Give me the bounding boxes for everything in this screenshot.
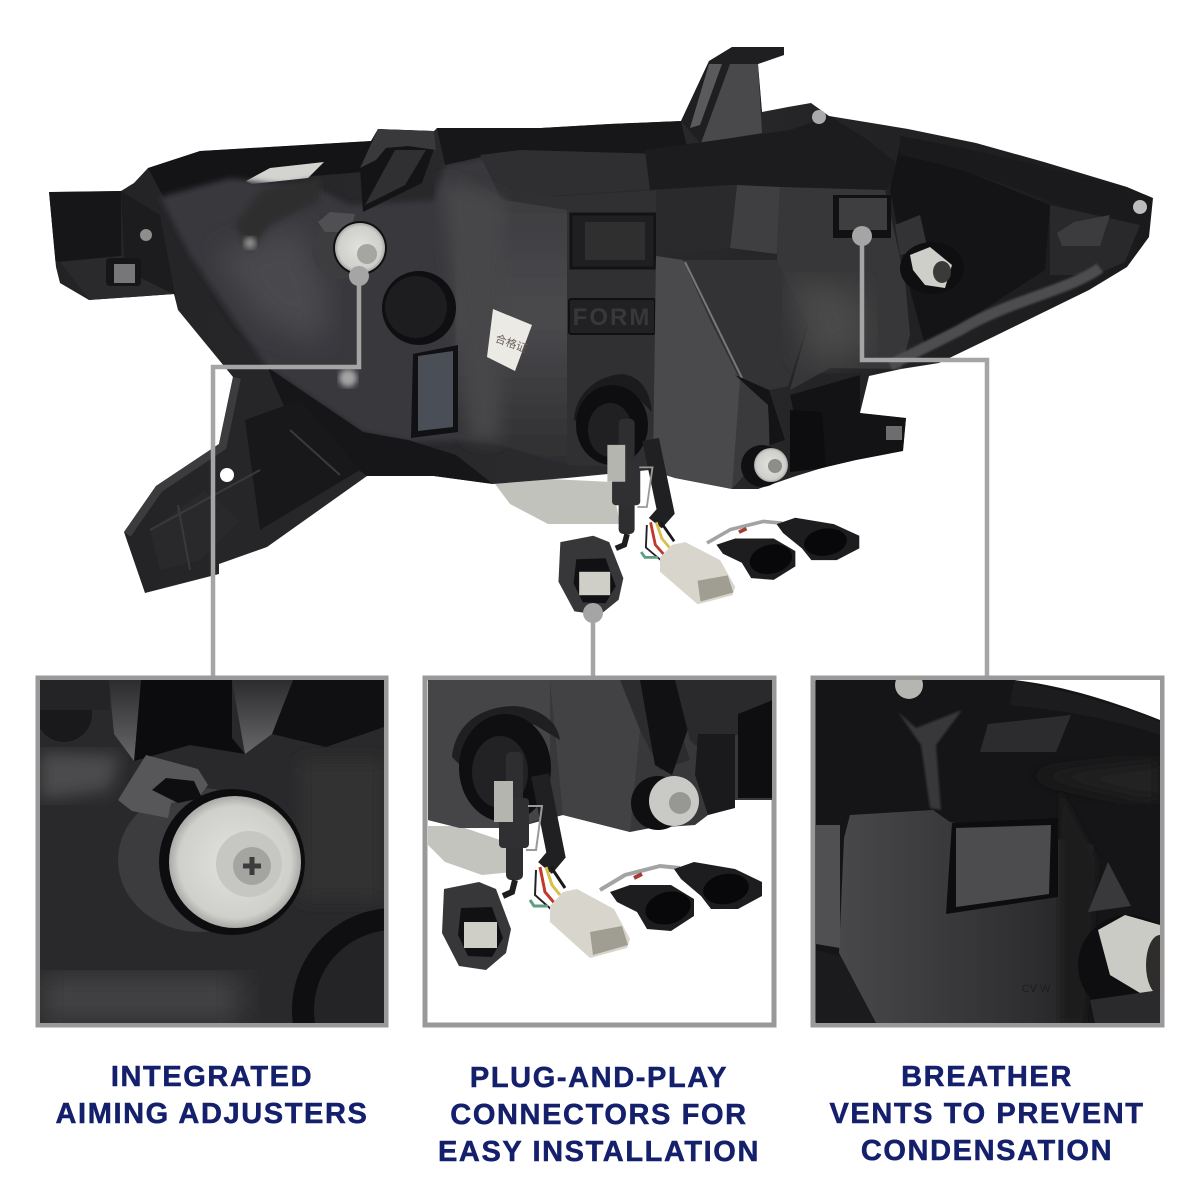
adjuster crop: [631, 776, 672, 830]
flap: [980, 715, 1071, 752]
white corner: [1014, 680, 1160, 720]
wiring harness close-up: [442, 752, 762, 970]
wire socket: [574, 374, 652, 465]
bulb socket: [1078, 915, 1178, 1015]
top rim and sticker: [148, 141, 371, 200]
plate: [839, 810, 1094, 1023]
arm band: [124, 377, 233, 532]
black plug two: [674, 862, 762, 909]
right vent: [833, 195, 891, 238]
FORM plate: [569, 299, 655, 334]
dark housing: [816, 680, 1160, 1023]
wire socket crop: [452, 706, 560, 764]
left tab shading: [49, 191, 121, 262]
caption: breather vents: [829, 1061, 1145, 1167]
left tab window: [106, 258, 141, 286]
paper sticker: [487, 309, 532, 371]
lower clip: [790, 375, 906, 468]
callout line: connectors: [583, 603, 603, 676]
top wedge bracket: [360, 129, 434, 212]
round cap: [382, 271, 456, 345]
box left face: [458, 200, 567, 454]
left connector: [442, 882, 511, 970]
caption: connectors: EASY INSTALLATION: [438, 1136, 760, 1168]
left lobe: [160, 155, 520, 442]
caption: aiming adjusters: INTEGRATED: [111, 1061, 313, 1093]
caption: connectors: [438, 1062, 760, 1168]
background plastic: [40, 680, 384, 1023]
caption: breather vents: CONDENSATION: [861, 1135, 1113, 1167]
callout line: aiming adjusters: [213, 266, 369, 676]
tip bolt: [1133, 200, 1147, 214]
dark recesses: [134, 680, 245, 761]
panel: aiming adjuster close-up: [36, 676, 388, 1028]
upper center band: [646, 116, 854, 190]
fins: [109, 680, 141, 761]
lower left dark: [816, 950, 876, 1023]
top bolt: [812, 110, 826, 124]
box label window: [571, 214, 655, 268]
bulb socket: [895, 215, 964, 294]
caption: breather vents: VENTS TO PREVENT: [829, 1098, 1145, 1130]
left breather vent: [411, 345, 458, 438]
small screw on tab: [140, 229, 152, 241]
adjuster ring: [118, 788, 218, 932]
left bar: [816, 825, 840, 948]
screw: [895, 671, 923, 699]
headlight product photo: FORM: [573, 304, 651, 331]
molded marks: CV W: [1022, 983, 1051, 995]
caption: aiming adjusters: AIMING ADJUSTERS: [56, 1098, 368, 1130]
white connector: [550, 889, 630, 958]
housing silhouette: [49, 47, 1153, 593]
caption: breather vents: BREATHER: [901, 1061, 1073, 1093]
cap bottom right: [292, 908, 384, 1023]
lower adjuster: [741, 445, 788, 487]
aiming adjuster: [312, 212, 387, 279]
callout line: breather vents: [852, 226, 987, 676]
bracket mounting hole: [220, 468, 234, 482]
panel: breather vent close-up: [813, 671, 1178, 1025]
breather vent: [946, 818, 1058, 914]
rim highlights: [906, 137, 907, 138]
metal washer: [169, 796, 301, 928]
triangle rib: [1088, 862, 1131, 912]
rim band: [1010, 680, 1160, 735]
silver heat sink: [495, 478, 620, 524]
lens dark zone: [890, 145, 1050, 345]
housing crop: [428, 680, 773, 832]
paper sticker: 合格证: [493, 331, 529, 355]
caption: aiming adjusters: [56, 1061, 368, 1130]
right box: [655, 268, 769, 489]
caption: connectors: CONNECTORS FOR: [450, 1099, 748, 1131]
stalk: [681, 47, 784, 143]
black plug one: [610, 885, 694, 931]
rib: [898, 710, 962, 810]
silver heat sink crop: [428, 826, 513, 875]
panel: connectors close-up: [425, 678, 774, 1025]
wiring harness: [558, 419, 859, 615]
top ribs strip: [437, 121, 686, 165]
right flat panel: [777, 187, 910, 390]
caption: connectors: PLUG-AND-PLAY: [470, 1062, 728, 1094]
